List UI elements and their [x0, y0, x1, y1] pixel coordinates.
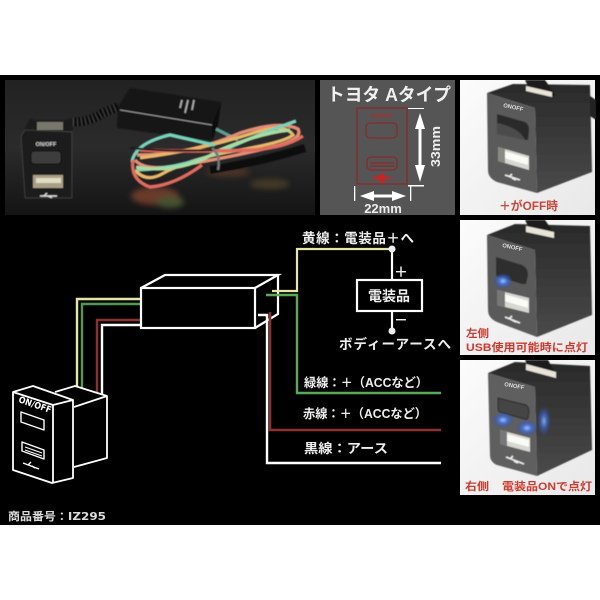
switch module diagram: [13, 386, 107, 483]
wiring: white wire from switch to box: [102, 325, 141, 395]
wiring: red wire from switch to box: [97, 320, 141, 392]
wiring: yellow wire from switch to box: [77, 299, 141, 386]
label: green wire: 緑線：＋（ACCなど）: [304, 375, 428, 390]
black backdrop: [0, 75, 600, 525]
wiring: red ACC wire: [270, 312, 441, 430]
control box diagram: [141, 275, 278, 328]
panel: Toyota A type dimensions: [320, 80, 455, 216]
panel: switch photo, both lit: [460, 360, 595, 495]
panel: switch photo, plus off: ONOFF: [503, 103, 524, 113]
label: yellow wire: 黄線：電装品＋へ: [302, 230, 414, 246]
control box: [117, 88, 221, 141]
label: red wire: 赤線：＋（ACCなど）: [303, 406, 427, 421]
label: body earth: ボディーアースへ: [339, 336, 452, 352]
panel: product photo: ON/OFF: [36, 142, 57, 148]
wires: [132, 121, 303, 187]
wiring: green ACC wire: [266, 295, 441, 393]
panel: switch photo, both lit: ONOFF: [504, 382, 525, 392]
panel heading: トヨタ Aタイプ: [327, 85, 451, 105]
panel: switch photo, both lit: 電装品ONで点灯: [502, 479, 592, 493]
wiring: green wire from switch to box: [82, 304, 141, 388]
caption: 左側: [466, 326, 489, 340]
caption: ＋がOFF時: [499, 198, 558, 213]
dimension 33mm: 33mm: [428, 126, 443, 167]
accessory block diagram: ＋: [394, 264, 408, 280]
switch cable: [73, 107, 118, 122]
accessory block diagram: －: [394, 312, 408, 328]
wiring: yellow wire to accessory: [272, 249, 392, 291]
panel: product photo: [5, 80, 315, 215]
accessory block diagram: [357, 246, 422, 334]
label: black wire: 黒線：アース: [304, 441, 388, 456]
panel: switch photo, left lit: USB使用可能時に点灯: [466, 340, 588, 354]
accessory block diagram: 電装品: [368, 288, 410, 304]
reflection of wires: [131, 167, 290, 208]
switch module: [24, 118, 73, 131]
panel: switch photo, left lit: [460, 220, 595, 355]
panel: switch photo, left lit: ONOFF: [502, 243, 523, 253]
caption: 右側: [465, 479, 489, 493]
product number: 商品番号：IZ295: [8, 509, 106, 523]
wiring: black earth wire: [258, 315, 441, 463]
switch outline: ON/OFF: [371, 114, 394, 120]
switch module diagram: ON/OFF: [17, 395, 52, 416]
dimension 22mm: 22mm: [364, 201, 402, 216]
panel: switch photo, plus off: [460, 80, 596, 215]
